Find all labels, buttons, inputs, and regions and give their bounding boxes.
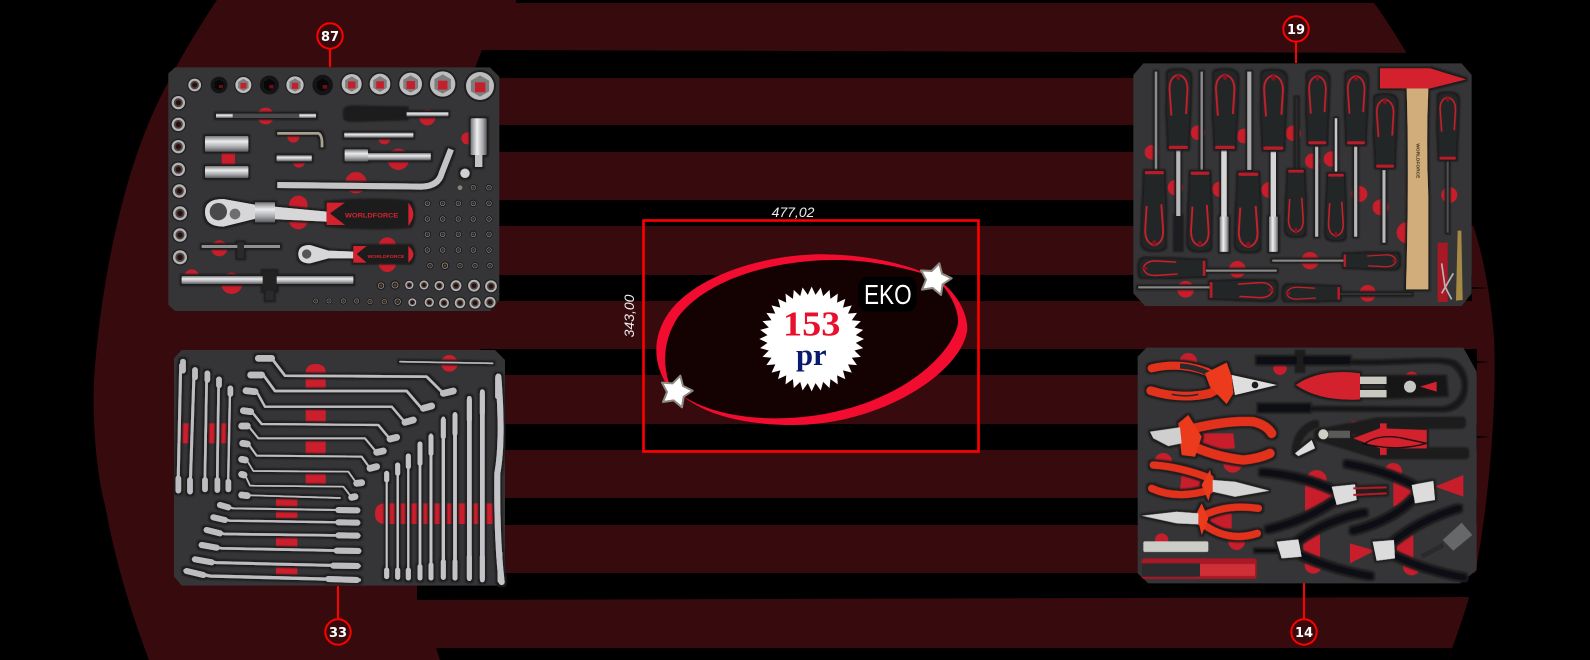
red foam half discs [1145,125,1457,302]
circlip pliers [1255,464,1463,577]
combination wrenches left [178,362,230,492]
vertical combination wrenches right [387,362,502,582]
diagonal cutters [1150,415,1272,460]
hammer [1380,68,1466,289]
top handles [1167,70,1458,168]
dark ellipse interior [665,260,958,418]
water pump pliers [1295,423,1463,456]
panel: screwdriver and hammer tray [1133,63,1472,306]
red foam recesses [184,108,473,294]
red foam recesses [1155,353,1463,575]
feeler gauge [1143,541,1208,552]
double offset ring wrenches [241,358,455,498]
callout: 33: 33 [329,626,347,641]
horizontal screwdrivers [1138,253,1412,301]
magnetic pickup tool [1257,352,1465,412]
red foam strips [182,355,493,575]
callout: 87 [317,23,343,67]
top row sockets [187,69,496,102]
unit pr: pr [796,338,827,372]
extensions and adapters [205,107,487,187]
small socket rows [312,279,498,310]
label: height dimension: 343,00 [621,294,637,337]
hammer: WORLDFORCE [1415,143,1420,178]
star bottom left [662,376,693,407]
starburst [759,287,864,391]
T bar and small ratchet: WORLDFORCE [368,254,404,259]
center: red dimension frame [644,220,978,452]
callout: 87: 87 [321,30,339,45]
bit grid [424,184,494,270]
sliding T handle [182,271,353,300]
callout: 19: 19 [1287,23,1305,38]
tester [1142,558,1257,579]
hose clamp pliers [1296,372,1447,400]
callout: 14 [1291,583,1317,645]
bottom handles [1142,170,1345,252]
charger [1422,523,1472,557]
probe and wire [1438,231,1463,302]
callout: 33 [325,586,351,645]
panel: pliers tray [1138,348,1477,583]
panel: wrench tray [174,350,505,586]
callout: 14: 14 [1295,626,1313,641]
left column sockets [170,95,188,266]
star top right [921,263,952,295]
large ratchet [205,199,413,227]
label: width dimension: 477,02 [772,204,815,220]
logo: 153 pr badge [656,254,967,425]
combination wrenches bottom [185,505,360,580]
EKO mark: EKO [864,279,912,310]
large ratchet: WORLDFORCE [345,213,399,220]
number 153: 153 [783,304,840,343]
combination pliers [1151,363,1277,404]
shafts [1156,72,1448,252]
panel: socket and ratchet tray [168,67,499,311]
long nose pliers [1142,465,1269,536]
background: black horizontal stripes [417,0,1490,660]
callout: 19 [1283,16,1309,63]
red swoosh ring [656,254,967,425]
T bar and small ratchet [202,242,413,263]
